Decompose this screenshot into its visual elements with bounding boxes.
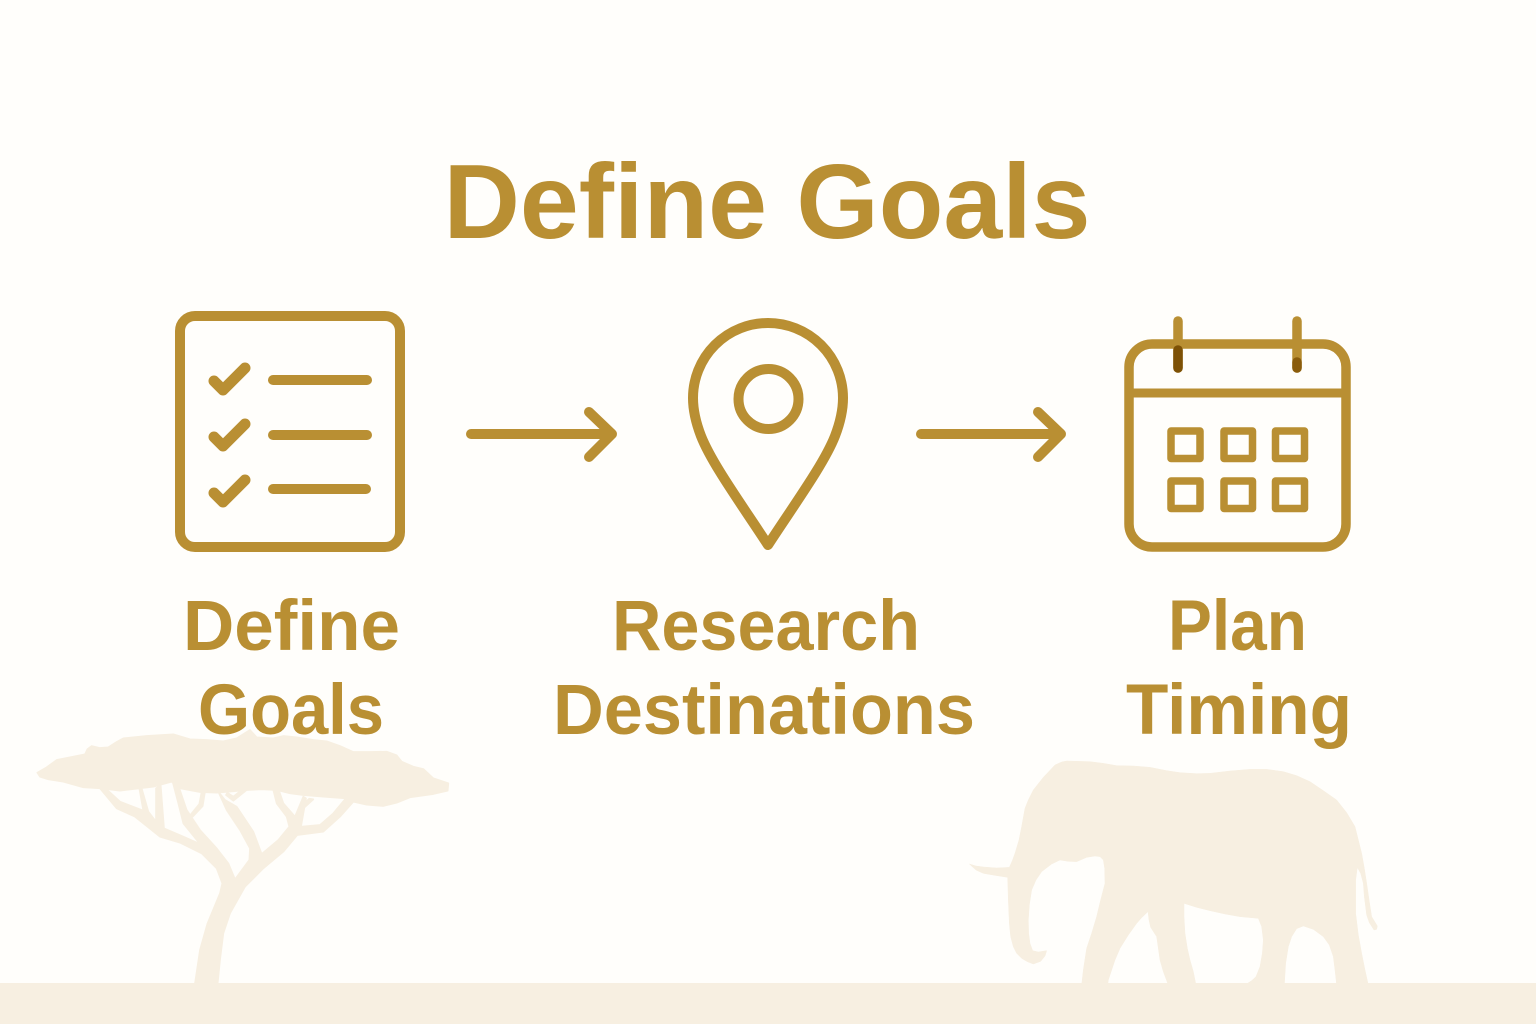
label: research destinations: Destinations: [553, 671, 975, 750]
checklist row 3: [214, 480, 366, 502]
label: plan timing: Timing: [1126, 671, 1352, 750]
arrow: goals to destinations: [471, 412, 612, 457]
arrow: destinations to timing: [921, 412, 1061, 457]
label: define goals: Define: [183, 587, 400, 666]
calendar ring right: [1292, 321, 1302, 368]
ground band: [0, 983, 1536, 1024]
label: research destinations: Research: [612, 587, 920, 666]
title: Define Goals: [444, 143, 1090, 261]
calendar header line: [1129, 388, 1346, 398]
label: define goals: [183, 587, 400, 750]
elephant silhouette: [969, 761, 1377, 985]
label: research destinations: [553, 587, 975, 750]
checklist row 2: [214, 424, 367, 446]
acacia tree silhouette: [37, 730, 448, 983]
label: plan timing: Plan: [1168, 587, 1307, 666]
icon: checklist: [180, 316, 400, 547]
calendar frame: [1129, 344, 1346, 547]
calendar ring left: [1173, 321, 1183, 368]
icon: calendar: [1129, 321, 1346, 547]
checklist row 1: [214, 368, 367, 390]
calendar date grid: [1171, 431, 1304, 508]
icon: map pin: [693, 323, 843, 545]
label: plan timing: [1126, 587, 1352, 750]
checklist frame: [180, 316, 400, 547]
label: define goals: Goals: [198, 671, 384, 750]
